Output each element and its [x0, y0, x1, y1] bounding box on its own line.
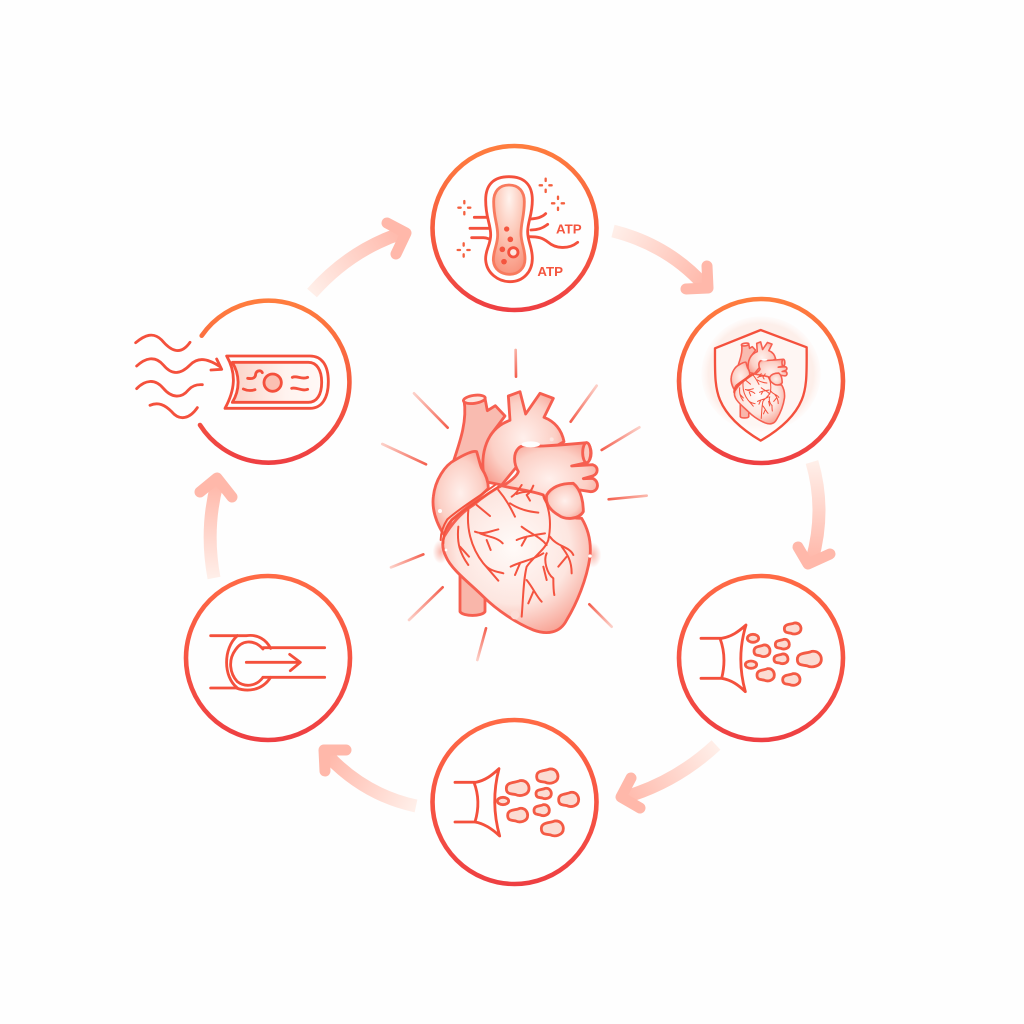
panel: particles release right [679, 576, 843, 740]
ATP labels: ATP [556, 221, 582, 236]
ring [432, 720, 596, 884]
panel: vessel constriction [186, 576, 350, 740]
icon: vessel with particles [701, 623, 821, 692]
ring [679, 576, 843, 740]
radiating energy rays [382, 350, 647, 660]
icon: mitochondrion with ATP [458, 177, 582, 282]
ring [186, 576, 350, 740]
arrow: right [798, 462, 830, 564]
ring [679, 299, 843, 463]
panel: mitochondrion ATP [432, 146, 596, 310]
panel: flow into vessel [136, 301, 349, 463]
flow waves [136, 335, 222, 418]
vessel section [225, 356, 328, 408]
icon: heart in shield [701, 316, 821, 441]
arrow: lower right [621, 745, 716, 808]
side glows [433, 540, 601, 568]
small heart [731, 342, 787, 424]
arrow: left [200, 478, 232, 578]
central heart illustration [382, 350, 647, 660]
panel: protected heart shield [679, 299, 843, 463]
arrow: upper left [312, 223, 406, 293]
sparkles [458, 179, 564, 257]
arrow: lower left [324, 750, 416, 806]
open ring [200, 301, 349, 463]
icon: vessel with particles [455, 769, 579, 836]
ATP labels [537, 221, 582, 279]
cycle arrows [200, 223, 830, 808]
panel: particles release bottom [432, 720, 596, 884]
ring [432, 146, 596, 310]
anatomical heart [433, 392, 597, 633]
arrow: upper right [613, 231, 708, 289]
icon: wavy flow into vessel [136, 335, 328, 418]
ATP labels: ATP [537, 264, 563, 279]
icon: narrowed vessel with arrow [211, 635, 325, 690]
sparkles [438, 437, 592, 619]
